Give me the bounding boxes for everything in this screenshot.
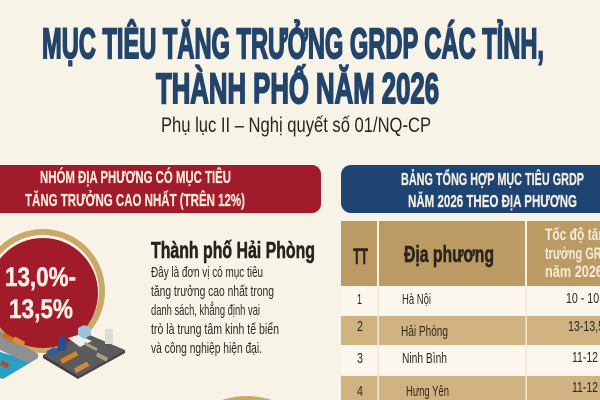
text block: Hai Phong description [151, 265, 279, 357]
panel: Hai Phong growth badge: 13,5% [9, 294, 73, 324]
table header row [341, 221, 600, 286]
table header row: Địa phương [404, 241, 494, 267]
table header row: TT [353, 244, 368, 269]
subtitle: Phụ lục II – Nghị quyết số 01/NQ-CP [161, 114, 431, 137]
table row 4: 4 [357, 384, 363, 400]
icon: port illustration [0, 325, 125, 379]
table row 2: Hải Phòng [401, 324, 448, 340]
text block: Hai Phong description: danh sách, khẳng định vai [151, 301, 260, 319]
panel: Hai Phong growth badge: 13,0%- [5, 262, 76, 292]
table row 1: 1 [357, 292, 362, 308]
heading: Hai Phong: Thành phố Hải Phòng [151, 237, 315, 263]
table row 4: Hưng Yên [406, 384, 449, 400]
table row 3: 3 [357, 351, 363, 367]
table row 1: Hà Nội [402, 292, 431, 308]
table row 2 [341, 316, 600, 345]
panel: highest growth group heading: NHÓM ĐỊA PHƯƠNG CÓ MỤC TIÊU [40, 166, 231, 187]
text block: Hai Phong description: và công nghiệp hiện đại. [151, 341, 262, 357]
text block: Hai Phong description: Đây là đơn vị có mục tiêu [151, 265, 263, 281]
panel: highest growth group heading [0, 165, 321, 213]
panel: Hai Phong growth badge [0, 232, 102, 350]
next growth badge, cropped [222, 396, 272, 400]
table row 2: 2 [357, 319, 363, 335]
panel: summary table heading [341, 165, 600, 213]
table row 3: Ninh Bình [402, 351, 447, 367]
text block: Hai Phong description: trò là trung tâm kinh tế biển [151, 322, 279, 338]
text block: Hai Phong description: tăng trưởng cao nhất trong [151, 284, 274, 300]
title [42, 19, 544, 113]
table row 1 [341, 287, 600, 315]
table row 4 [341, 376, 600, 400]
table: GRDP targets [341, 221, 600, 400]
panel: highest growth group heading: TĂNG TRƯỞNG CAO NHẤT (TRÊN 12%) [25, 189, 245, 210]
table row 3 [341, 346, 600, 374]
